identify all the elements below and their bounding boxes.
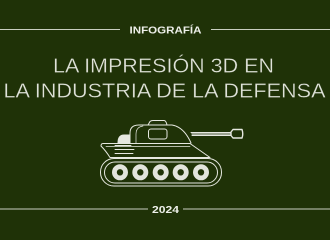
title: LA INDUSTRIA DE LA DEFENSA [4,80,326,102]
icon: tank [100,120,243,186]
label: infografía: INFOGRAFÍA [130,24,202,36]
tank turret [118,120,191,143]
label: year: 2024 [152,205,180,216]
title [4,54,326,102]
tank barrel [191,130,243,138]
title: LA IMPRESIÓN 3D EN [53,54,274,78]
tank tracks [100,158,222,186]
tank wheels [114,167,207,178]
tank hull [101,144,210,158]
